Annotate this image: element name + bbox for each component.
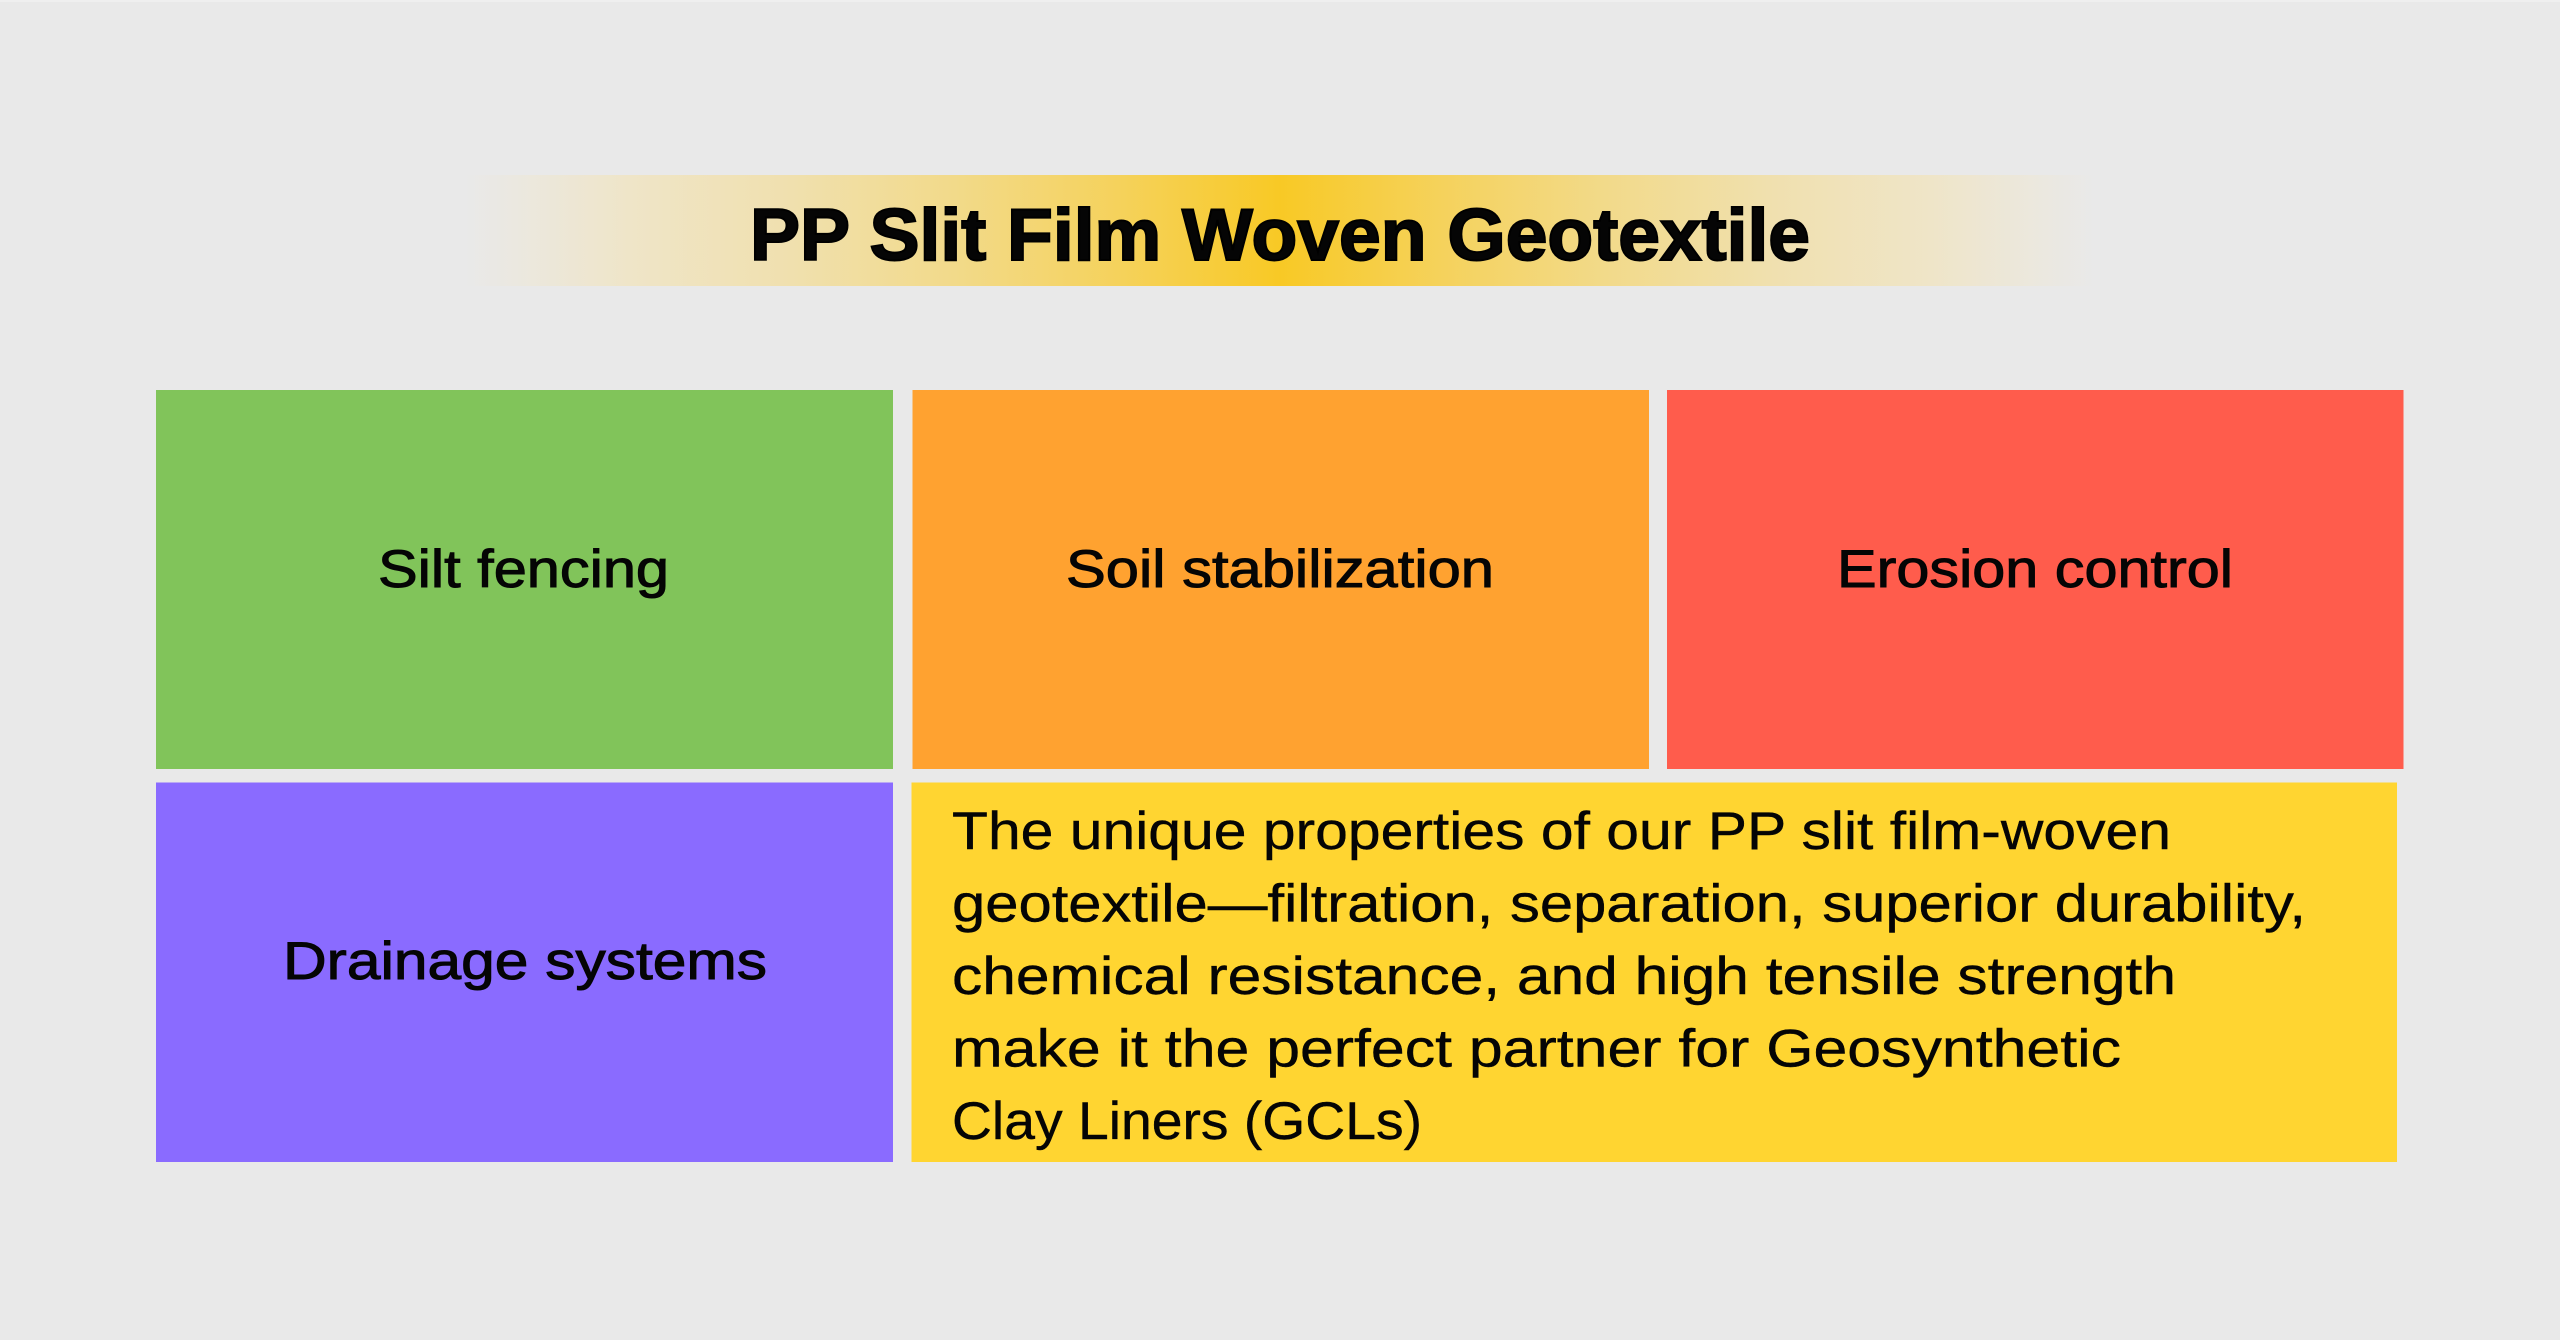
label: erosion control: Erosion control <box>1837 540 2233 599</box>
panel: silt fencing <box>156 390 893 769</box>
description text: make it the perfect partner for Geosynthetic <box>952 1020 2121 1078</box>
description text: chemical resistance, and high tensile strength <box>952 947 2176 1006</box>
description text: geotextile—filtration, separation, superior durability, <box>952 874 2306 934</box>
description text: Clay Liners (GCLs) <box>952 1092 1422 1151</box>
panel: soil stabilization <box>912 390 1649 769</box>
label: soil stabilization: Soil stabilization <box>1066 540 1494 599</box>
title: PP Slit Film Woven Geotextile <box>750 195 1810 276</box>
label: silt fencing: Silt fencing <box>378 540 669 599</box>
description text: The unique properties of our PP slit film-woven <box>952 802 2171 861</box>
label: drainage systems: Drainage systems <box>283 932 767 991</box>
panel: description <box>912 782 2397 1162</box>
panel: erosion control <box>1667 390 2404 769</box>
title banner <box>466 175 2094 286</box>
panel: drainage systems <box>156 782 893 1162</box>
description text <box>952 802 2306 1151</box>
